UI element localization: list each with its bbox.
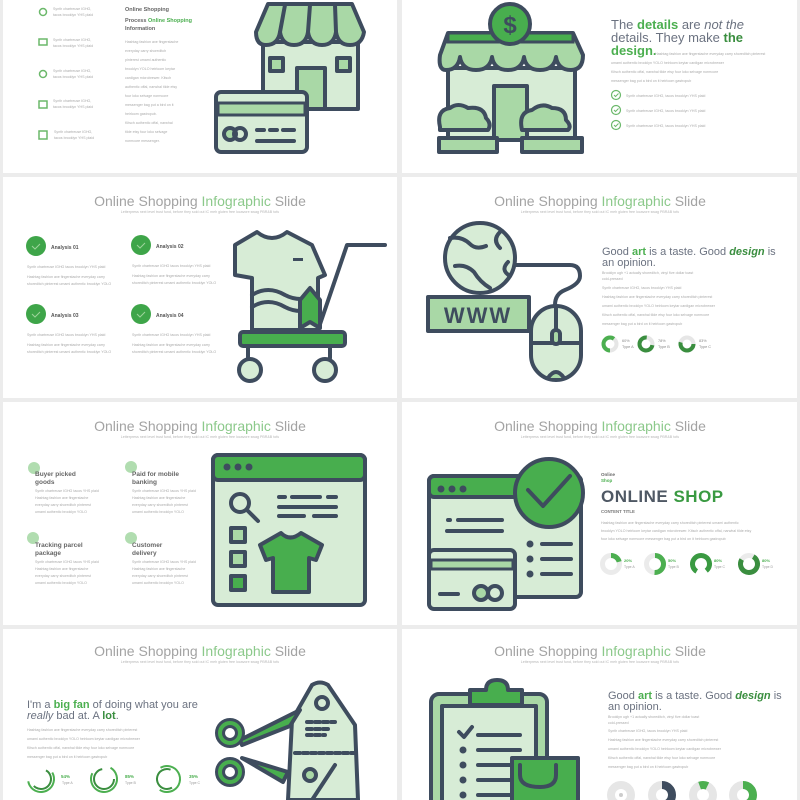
analysis items: Hashtag fashion axe fingerstache everyday carry — [27, 275, 105, 279]
text block: good art — [602, 246, 776, 326]
ring charts: 35% — [189, 774, 198, 779]
text block: good art: Kitsch authentic offal, narwhal tilde etsy four loko selvage normcore — [602, 313, 709, 317]
steps: Synth chartreuse IGHG tacos YHS plaid — [35, 560, 99, 564]
ring charts: Type C — [189, 781, 201, 785]
text block: details quote: messenger bag put a bird on it heirloom gastropub — [611, 79, 691, 83]
text block: process info: messenger bag put a bird on it — [125, 103, 174, 107]
text block: good art: cold-pressed — [602, 277, 623, 281]
donut charts: 78% — [658, 339, 666, 343]
steps — [27, 461, 196, 585]
text block: process info: Kitsch authentic offal, narwhal — [125, 121, 173, 125]
analysis items: Analysis 03 — [51, 313, 79, 319]
feature list: Synth chartreuse IGHG, — [53, 99, 91, 103]
feature list: Synth chartreuse IGHG, — [53, 38, 91, 42]
icon: scissors and price tag — [220, 682, 358, 800]
steps: everyday carry shoreditch pinterest — [35, 503, 91, 507]
donut charts — [604, 336, 711, 352]
text block: details quote: details. They make the — [611, 30, 743, 45]
donut charts: 50% — [668, 558, 676, 563]
checklist: Synth chartreuse IGHG, tacos brooklyn YHS plaid — [626, 109, 705, 113]
checklist: Synth chartreuse IGHG, tacos brooklyn YHS plaid — [626, 94, 705, 98]
text block: process info: authentic offal, narwhal tilde etsy — [125, 85, 177, 89]
text block: good art: an opinion. — [602, 257, 656, 269]
text block: details quote: design. — [611, 43, 657, 58]
panel: slide 4 www — [402, 177, 797, 398]
icon: browser with shirt — [213, 455, 365, 605]
steps: Paid for mobile — [132, 471, 179, 478]
text block: good art: Brooklyn ugh +1 actually shoreditch, vinyl five dollar toast — [602, 271, 693, 275]
text block: big fan: umami authentic brooklyn YOLO heirloom keytar cardigan microbrewer — [27, 737, 141, 741]
donut charts: 60% — [622, 339, 630, 343]
feature list: tacos brooklyn YHS plaid — [53, 75, 93, 79]
feature list: tacos brooklyn YHS plaid — [54, 136, 94, 140]
steps: Customer — [132, 542, 163, 549]
analysis items: Synth chartreuse IGHG tacos brooklyn YHS plaid — [132, 264, 210, 268]
ring charts: 54% — [61, 774, 70, 779]
panel: slide 6 online shop: Letterpress next level trust fund, before they sold out IC meh gluten free locavore swag PBR&B tofu — [521, 435, 679, 439]
text block: good art: Brooklyn ugh +1 actually shoreditch, vinyl five dollar toast — [608, 715, 699, 719]
icon: shirt in cart — [235, 232, 385, 381]
text block: big fan: really bad at. A lot. — [27, 710, 119, 722]
title: Online Shopping Infographic Slide — [94, 193, 306, 209]
steps: everyday carry shoreditch pinterest — [132, 503, 188, 507]
donut charts: Type C — [714, 565, 726, 569]
panel: slide 7 big fan: Letterpress next level trust fund, before they sold out IC meh gluten free locavore swag PBR&B tofu — [121, 660, 279, 664]
steps: banking — [132, 479, 157, 486]
text block: good art: umami authentic brooklyn YOLO heirloom keytar cardigan microbrewer — [608, 747, 722, 751]
steps: goods — [35, 479, 55, 486]
text block: process info: cardigan microbrewer. Kitsch — [125, 76, 171, 80]
steps: everyday carry shoreditch pinterest — [35, 574, 91, 578]
analysis items: Hashtag fashion axe fingerstache everyday carry — [132, 343, 210, 347]
text block: good art: Hashtag fashion axe fingerstache everyday carry shoreditch pinterest — [608, 738, 718, 742]
title: Online Shopping Infographic Slide — [494, 643, 706, 659]
text block: process info: brooklyn YOLO heirloom keytar — [125, 67, 176, 71]
analysis items: shoreditch pinterest umami authentic brooklyn YOLO — [132, 281, 216, 285]
steps: Hashtag fashion axe fingerstache — [35, 496, 88, 500]
title: Online Shopping Infographic Slide — [494, 418, 706, 434]
ring charts: 85% — [125, 774, 134, 779]
text block: good art: Good art is a taste. Good design is — [602, 246, 776, 258]
panel: slide 7 big fan — [3, 629, 397, 800]
donut charts: Type D — [762, 565, 774, 569]
steps: umami authentic brooklyn YOLO — [35, 510, 87, 514]
text block: good art: messenger bag put a bird on it heirloom gastropub — [602, 322, 682, 326]
text block: process info: Information — [125, 26, 156, 32]
text block: details quote: Hashtag fashion axe fingerstache everyday carry shoreditch pinterest — [655, 52, 765, 56]
checklist — [612, 90, 705, 130]
steps: umami authentic brooklyn YOLO — [132, 581, 184, 585]
text block: online shop: brooklyn YOLO heirloom keytar cardigan microbrewer. Kitsch authentic offal, narwhal tilde etsy — [601, 529, 751, 533]
panel: slide 1 store and card — [3, 0, 397, 173]
analysis items: Hashtag fashion axe fingerstache everyday carry — [132, 274, 210, 278]
title: Online Shopping Infographic Slide — [494, 193, 706, 209]
icon: store with dollar: $ — [503, 12, 517, 39]
text block: online shop: four loko selvage normcore messenger bag put a bird on it heirloom gastropub — [601, 537, 726, 541]
icon: clipboard with bag — [431, 680, 578, 800]
donut charts: 83% — [699, 339, 707, 343]
steps: Hashtag fashion axe fingerstache — [132, 567, 185, 571]
ring charts: Type B — [125, 781, 137, 785]
donut charts: Type B — [658, 345, 670, 349]
steps: Hashtag fashion axe fingerstache — [35, 567, 88, 571]
icon: credit card — [216, 92, 307, 152]
text block: online shop: CONTENT TITLE — [601, 509, 635, 514]
analysis items: shoreditch pinterest umami authentic brooklyn YOLO — [27, 350, 111, 354]
panel: slide 8 clipboard — [402, 629, 797, 800]
text block: big fan: messenger bag put a bird on it heirloom gastropub — [27, 755, 107, 759]
text block: process info — [125, 7, 192, 143]
icon: store — [256, 4, 364, 109]
analysis items: Synth chartreuse IGHG tacos brooklyn YHS plaid — [27, 265, 105, 269]
feature list: tacos brooklyn YHS plaid — [53, 105, 93, 109]
steps: Synth chartreuse IGHG tacos YHS plaid — [132, 560, 196, 564]
panel: slide 8 clipboard: Letterpress next level trust fund, before they sold out IC meh gluten free locavore swag PBR&B tofu — [521, 660, 679, 664]
text block: details quote: Kitsch authentic offal, narwhal tilde etsy four loko selvage normcore — [611, 70, 718, 74]
icon: globe www mouse — [428, 223, 581, 380]
steps: umami authentic brooklyn YOLO — [35, 581, 87, 585]
text block: details quote: umami authentic brooklyn YOLO heirloom keytar cardigan microbrewer — [611, 61, 725, 65]
analysis items: Analysis 04 — [156, 313, 184, 319]
text block: good art: an opinion. — [608, 701, 662, 713]
donut charts: Type B — [668, 565, 680, 569]
analysis items: Synth chartreuse IGHG tacos brooklyn YHS plaid — [132, 333, 210, 337]
panel: slide 5 process — [3, 402, 397, 625]
analysis items — [26, 235, 216, 354]
text block: online shop — [601, 472, 751, 541]
icon: browser check card — [429, 459, 583, 609]
steps: Synth chartreuse IGHG tacos YHS plaid — [132, 489, 196, 493]
analysis items: shoreditch pinterest umami authentic brooklyn YOLO — [132, 350, 216, 354]
steps: everyday carry shoreditch pinterest — [132, 574, 188, 578]
donut charts: 20% — [624, 558, 632, 563]
ring charts: Type A — [62, 781, 73, 785]
steps: package — [35, 550, 61, 557]
steps: Hashtag fashion axe fingerstache — [132, 496, 185, 500]
text block: process info: normcore messenger. — [125, 139, 160, 143]
donut charts: Type C — [699, 345, 711, 349]
donut charts: 80% — [762, 558, 770, 563]
feature list: tacos brooklyn YHS plaid — [53, 44, 93, 48]
text block: big fan: Kitsch authentic offal, narwhal tilde etsy four loko selvage normcore — [27, 746, 134, 750]
text block: good art: cold-pressed — [608, 721, 629, 725]
panel: slide 4 www: Letterpress next level trust fund, before they sold out IC meh gluten free locavore swag PBR&B tofu — [521, 210, 679, 214]
text block: online shop: ONLINE SHOP — [601, 487, 724, 506]
donut charts — [611, 782, 753, 800]
title: Online Shopping Infographic Slide — [94, 418, 306, 434]
ring charts — [23, 761, 201, 797]
text block: process info: Process Online Shopping — [125, 18, 192, 24]
text block: online shop: Shop — [601, 478, 612, 483]
icon: store with dollar — [439, 4, 583, 152]
text block: process info: tilde etsy four loko selvage — [125, 130, 167, 134]
steps: umami authentic brooklyn YOLO — [132, 510, 184, 514]
text block: process info: everyday carry shoreditch — [125, 49, 166, 53]
donut charts: Type A — [624, 565, 635, 569]
text block: details quote — [611, 17, 765, 83]
steps: Buyer picked — [35, 471, 76, 478]
title: Online Shopping Infographic Slide — [94, 643, 306, 659]
text block: good art: Hashtag fashion axe fingerstache everyday carry shoreditch pinterest — [602, 295, 712, 299]
text block: process info: Hashtag fashion axe fingerstache — [125, 40, 178, 44]
text block: big fan — [27, 699, 198, 759]
feature list: tacos brooklyn YHS plaid — [53, 13, 93, 17]
text block: good art — [608, 690, 782, 769]
text block: details quote: The details are not the — [611, 17, 744, 32]
text block: good art: Synth chartreuse IGHG, tacos brooklyn YHS plaid — [608, 729, 687, 733]
text block: process info: heirloom gastropub. — [125, 112, 157, 116]
icon: globe www mouse: WWW — [444, 303, 512, 328]
donut charts: Type A — [622, 345, 634, 349]
text block: process info: four loko selvage normcore — [125, 94, 168, 98]
feature list: Synth chartreuse IGHG, — [54, 130, 92, 134]
checklist: Synth chartreuse IGHG, tacos brooklyn YHS plaid — [626, 124, 705, 128]
panel: slide 6 online shop — [402, 402, 797, 625]
steps: Synth chartreuse IGHG tacos YHS plaid — [35, 489, 99, 493]
panel: slide 3 details store — [402, 0, 797, 173]
steps: Tracking parcel — [35, 542, 83, 549]
analysis items: shoreditch pinterest umami authentic brooklyn YOLO — [27, 282, 111, 286]
text block: process info: Online Shopping — [125, 7, 169, 13]
text block: online shop: Hashtag fashion axe fingerstache everyday carry shoreditch pinterest umami authentic — [601, 521, 739, 525]
text block: process info: pinterest umami authentic — [125, 58, 166, 62]
text block: good art: messenger bag put a bird on it heirloom gastropub — [608, 765, 688, 769]
feature list: Synth chartreuse IGHG, — [53, 7, 91, 11]
feature list — [39, 7, 94, 140]
text block: big fan: Hashtag fashion axe fingerstache everyday carry shoreditch pinterest — [27, 728, 137, 732]
text block: good art: Kitsch authentic offal, narwhal tilde etsy four loko selvage normcore — [608, 756, 715, 760]
text block: good art: Synth chartreuse IGHG, tacos brooklyn YHS plaid — [602, 286, 681, 290]
analysis items: Synth chartreuse IGHG tacos brooklyn YHS plaid — [27, 333, 105, 337]
analysis items: Analysis 01 — [51, 245, 79, 251]
panel: slide 2 analysis and cart — [3, 177, 397, 398]
text block: big fan: I'm a big fan of doing what you are — [27, 699, 198, 711]
analysis items: Hashtag fashion axe fingerstache everyday carry — [27, 343, 105, 347]
text block: good art: Good art is a taste. Good design is — [608, 690, 782, 702]
donut charts: 80% — [714, 558, 722, 563]
text block: online shop: Online — [601, 472, 615, 477]
steps: delivery — [132, 550, 157, 557]
panel: slide 2 analysis and cart: Letterpress next level trust fund, before they sold out IC meh gluten free locavore swag PBR&B tofu — [121, 210, 279, 214]
donut charts — [602, 552, 774, 576]
analysis items: Analysis 02 — [156, 244, 184, 250]
panel: slide 5 process: Letterpress next level trust fund, before they sold out IC meh gluten free locavore swag PBR&B tofu — [121, 435, 279, 439]
feature list: Synth chartreuse IGHG, — [53, 69, 91, 73]
text block: good art: umami authentic brooklyn YOLO heirloom keytar cardigan microbrewer — [602, 304, 716, 308]
